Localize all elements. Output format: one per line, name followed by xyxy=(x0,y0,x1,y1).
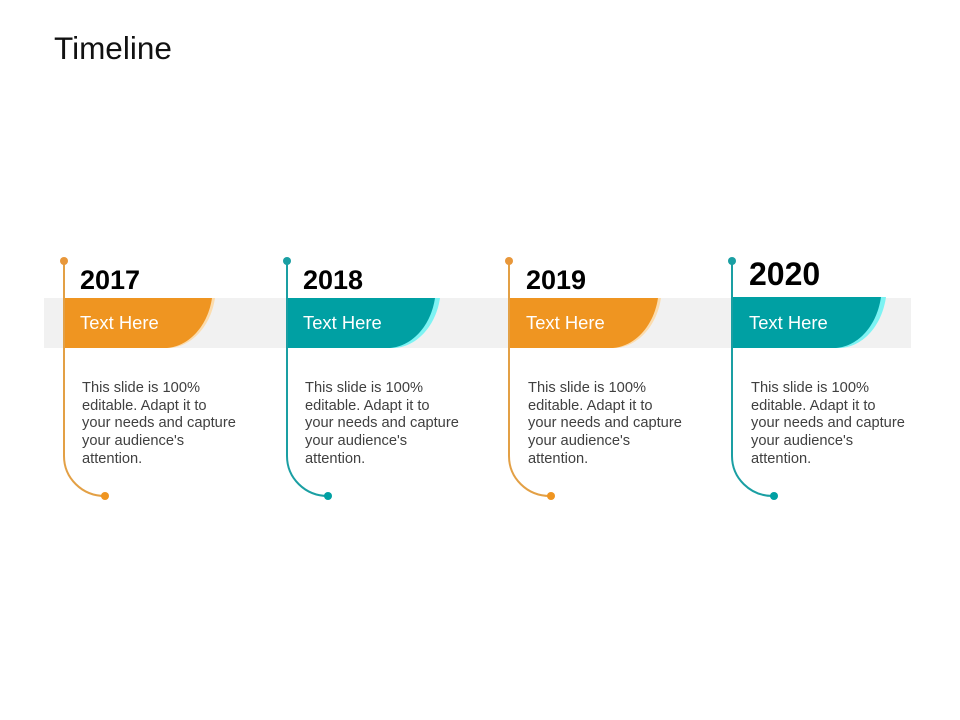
description 2018: editable. Adapt it to xyxy=(305,398,430,414)
description 2019: your audience's xyxy=(528,433,630,449)
description 2019: attention. xyxy=(528,451,588,467)
banner shadow 2017 xyxy=(64,298,215,348)
bottom dot 2017 xyxy=(101,492,109,500)
year 2018: 2018 xyxy=(303,265,363,295)
connector line 2020 xyxy=(732,261,773,496)
description 2019: This slide is 100% xyxy=(528,380,646,396)
description 2018: attention. xyxy=(305,451,365,467)
description 2017: attention. xyxy=(82,451,142,467)
top dot 2020 xyxy=(728,257,736,265)
connector line 2017 xyxy=(64,261,105,496)
description 2018: your needs and capture xyxy=(305,415,459,431)
description 2020: your audience's xyxy=(751,433,853,449)
description 2017: your needs and capture xyxy=(82,415,236,431)
banner 2020 xyxy=(732,297,881,348)
connector line 2019 xyxy=(509,261,550,496)
label 2020: Text Here xyxy=(749,312,828,333)
description 2020: This slide is 100% xyxy=(751,380,869,396)
title: Timeline xyxy=(54,30,172,66)
description 2018: your audience's xyxy=(305,433,407,449)
milestone: 2018 xyxy=(283,257,459,500)
bottom dot 2018 xyxy=(324,492,332,500)
description 2020: editable. Adapt it to xyxy=(751,398,876,414)
year 2019: 2019 xyxy=(526,265,586,295)
year 2017: 2017 xyxy=(80,265,140,295)
top dot 2017 xyxy=(60,257,68,265)
description 2019: editable. Adapt it to xyxy=(528,398,653,414)
description 2019: your needs and capture xyxy=(528,415,682,431)
description 2018: This slide is 100% xyxy=(305,380,423,396)
banner 2018 xyxy=(287,298,435,348)
connector line 2018 xyxy=(287,261,328,496)
top dot 2019 xyxy=(505,257,513,265)
label 2019: Text Here xyxy=(526,312,605,333)
top dot 2018 xyxy=(283,257,291,265)
description 2020: your needs and capture xyxy=(751,415,905,431)
banner 2017 xyxy=(64,298,212,348)
milestone: 2019 xyxy=(505,257,682,500)
milestone: 2020 xyxy=(728,256,905,500)
banner 2019 xyxy=(509,298,658,348)
label 2017: Text Here xyxy=(80,312,159,333)
description 2017: This slide is 100% xyxy=(82,380,200,396)
banner shadow 2019 xyxy=(509,298,661,348)
description 2020: attention. xyxy=(751,451,811,467)
description 2017: editable. Adapt it to xyxy=(82,398,207,414)
banner shadow 2018 xyxy=(287,298,440,348)
background band xyxy=(44,298,911,348)
year 2020: 2020 xyxy=(749,256,820,292)
description 2017: your audience's xyxy=(82,433,184,449)
label 2018: Text Here xyxy=(303,312,382,333)
milestone: 2017 xyxy=(60,257,236,500)
banner shadow 2020 xyxy=(732,297,886,348)
bottom dot 2019 xyxy=(547,492,555,500)
bottom dot 2020 xyxy=(770,492,778,500)
